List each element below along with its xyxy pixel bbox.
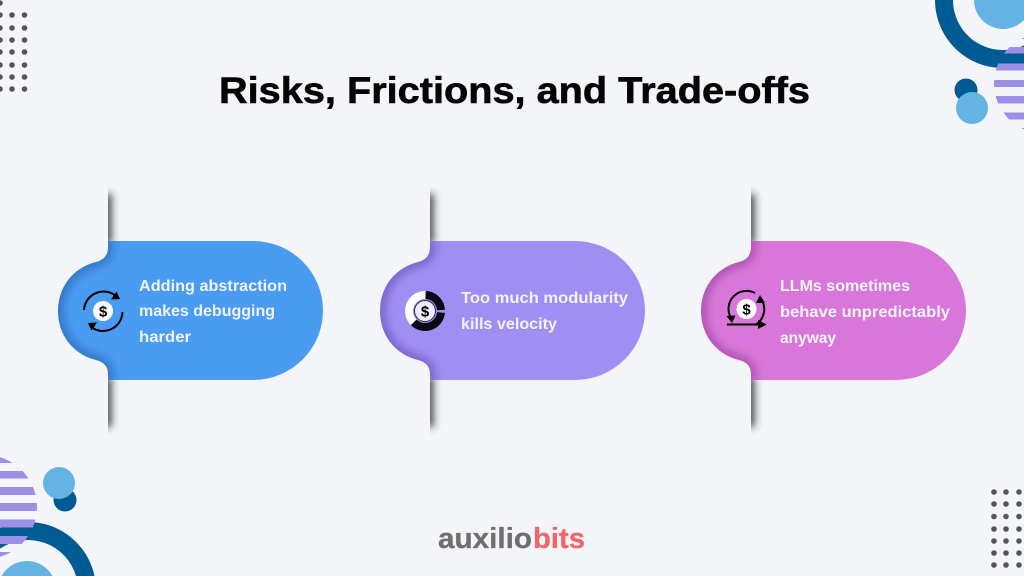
text: card 1: makes debugging [139, 303, 275, 320]
decoration: top-right circles [935, 0, 1024, 133]
text: card 2: kills velocity [461, 316, 557, 333]
text: card 3 [780, 278, 950, 347]
decoration: bottom-right dot grid [991, 489, 1022, 568]
text: card 2 [461, 290, 628, 333]
decoration: bottom-left circles [0, 455, 94, 576]
icon: dollar with loop arrow [726, 291, 766, 329]
text: card 2: Too much modularity [461, 290, 628, 307]
text: card 3: behave unpredictably [780, 304, 950, 321]
text: card 1 [139, 278, 287, 346]
logo: auxiliobits: auxilio [438, 523, 532, 555]
text: card 1: Adding abstraction [139, 278, 287, 295]
panel: card 2 [380, 194, 645, 427]
text: card 3: LLMs sometimes [780, 278, 910, 295]
icon: dollar with loop arrow: $ [742, 302, 751, 318]
icon: dollar with cycle arrows: $ [99, 304, 108, 320]
panel: card 3 [701, 194, 966, 427]
title: Risks, Frictions, and Trade-offs [219, 70, 810, 111]
logo: auxiliobits: bits [533, 523, 585, 555]
icon: donut with dollar: $ [421, 304, 430, 320]
text: card 1: harder [139, 329, 191, 346]
text: card 3: anyway [780, 330, 836, 347]
icon: donut with dollar [409, 295, 441, 327]
decoration: top-left dot grid [0, 0, 27, 92]
panel: card 1 [58, 194, 323, 427]
icon: dollar with cycle arrows [84, 292, 122, 331]
logo: auxiliobits [438, 523, 585, 555]
